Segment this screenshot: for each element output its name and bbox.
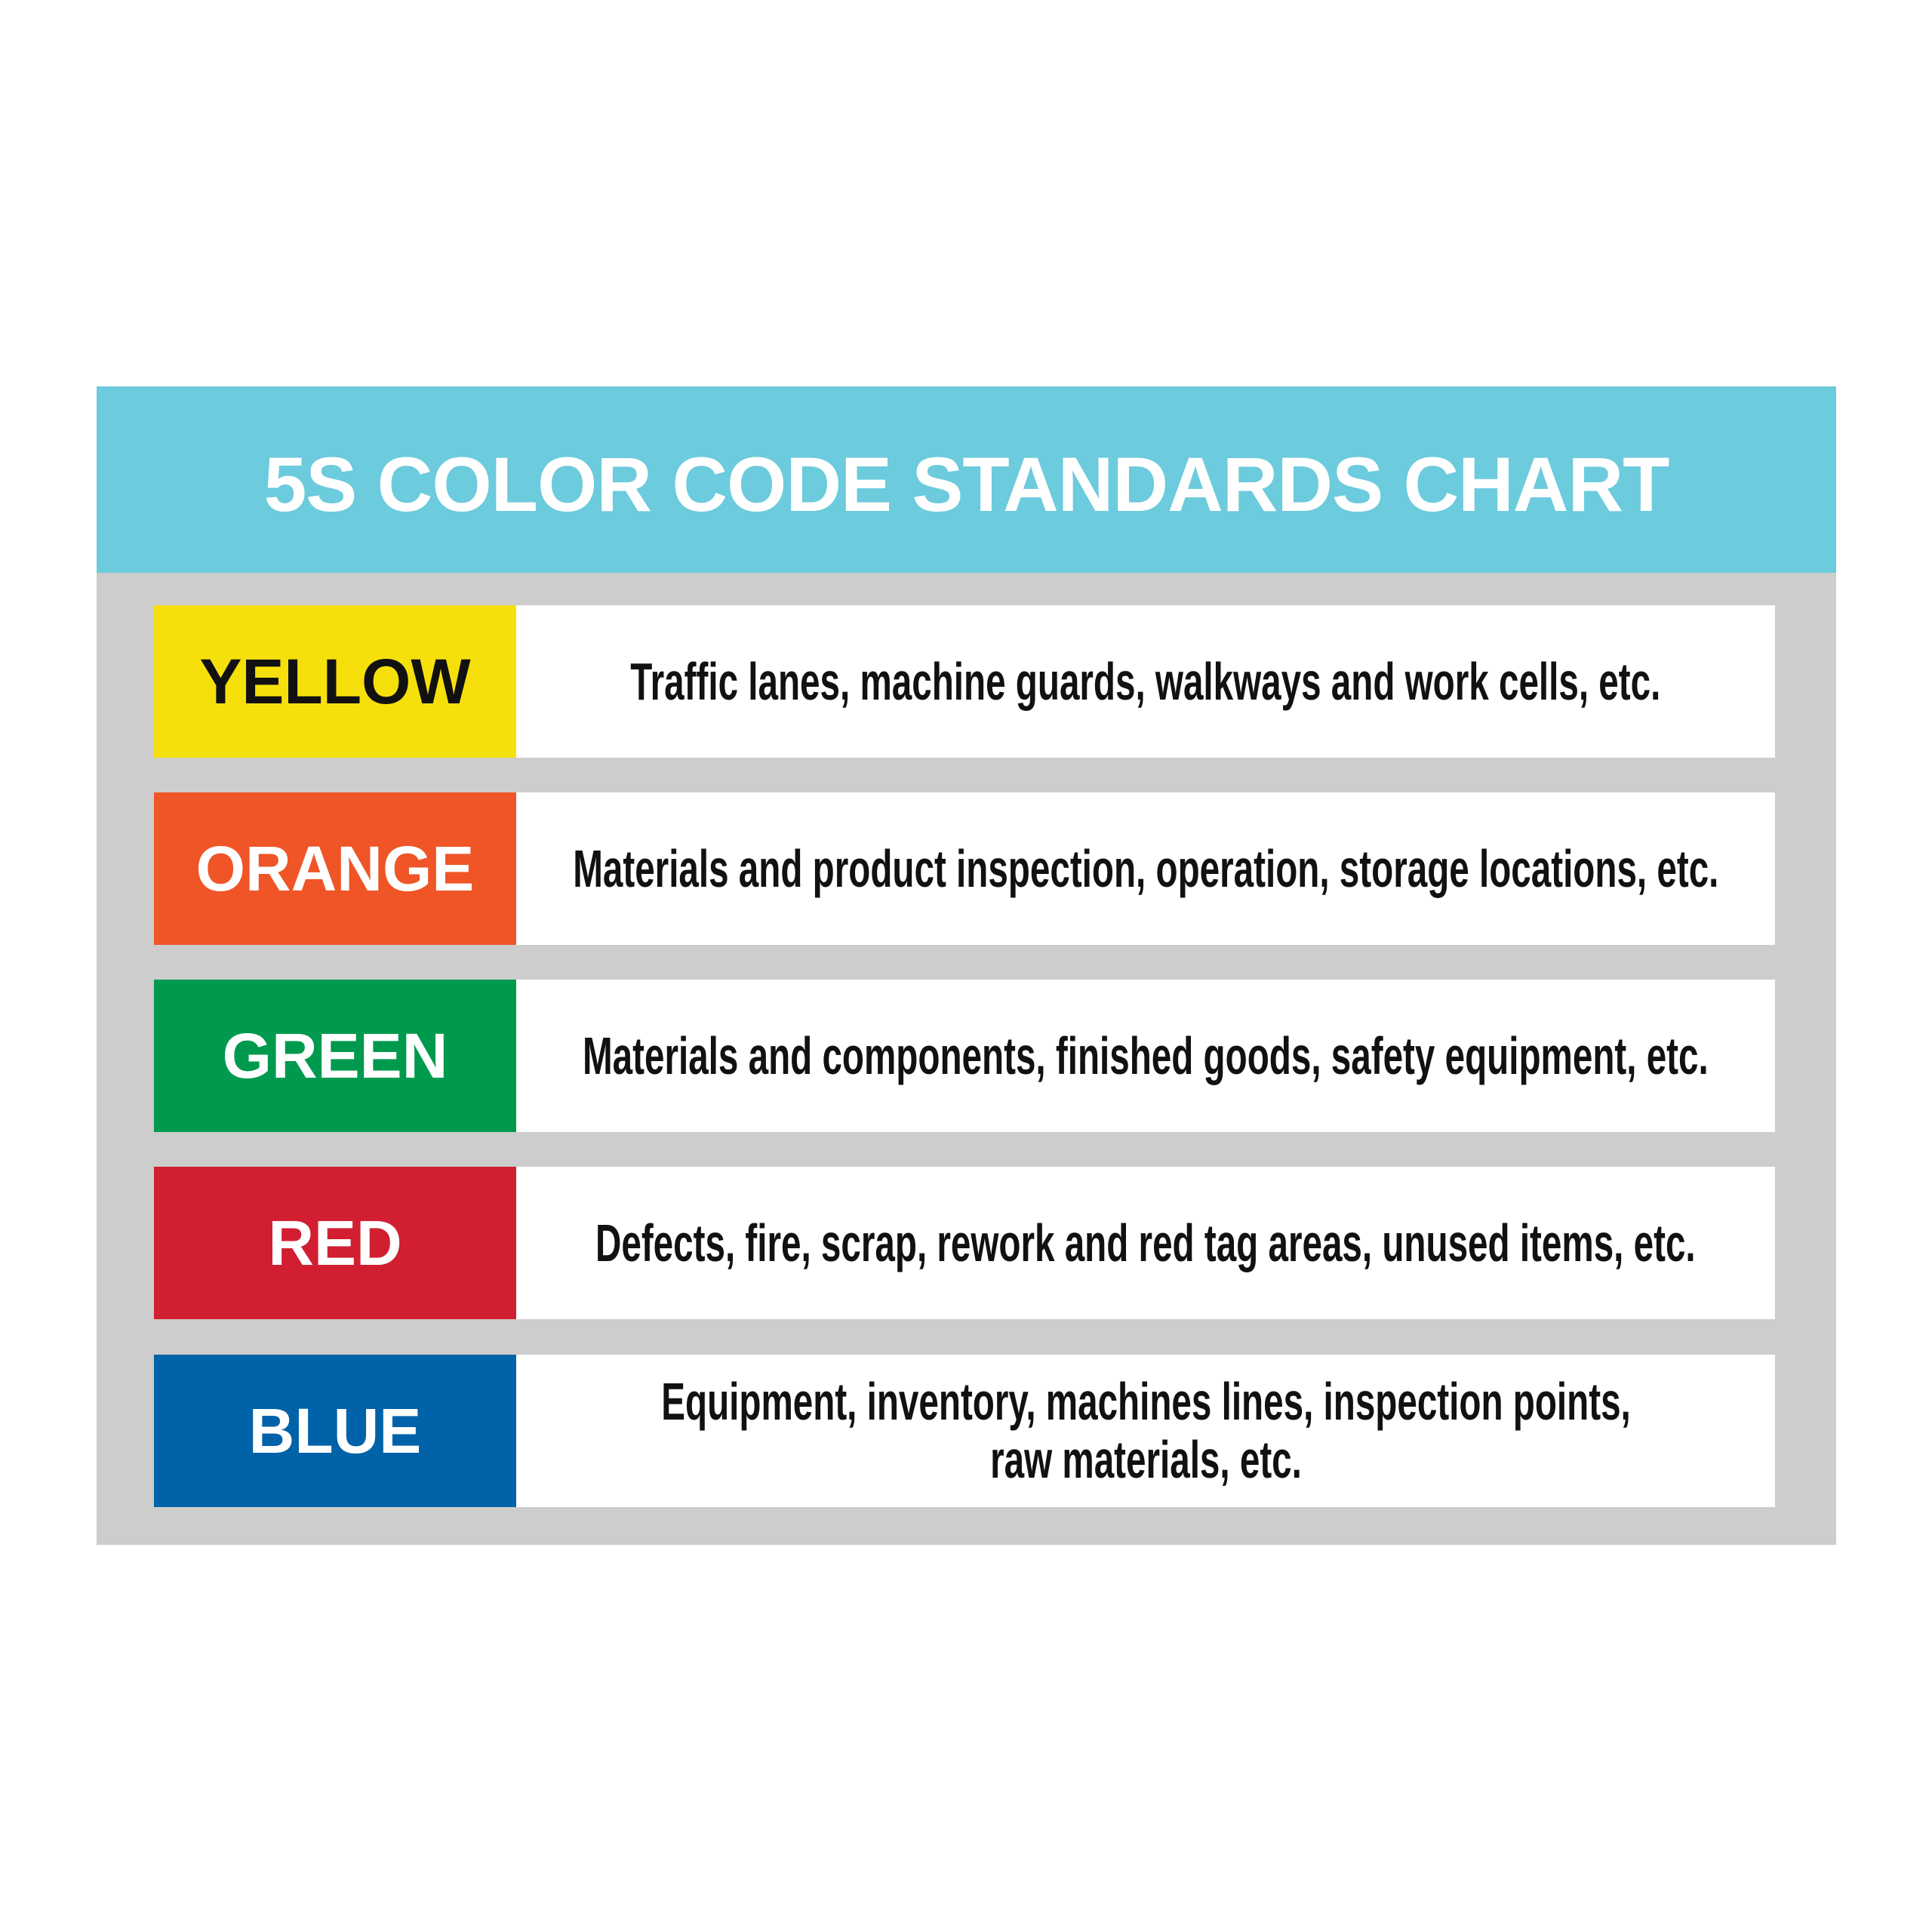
label: green bbox=[154, 980, 516, 1132]
panel: chart body bbox=[97, 573, 1836, 1545]
label: orange: ORANGE bbox=[196, 833, 474, 904]
row: orange bbox=[154, 792, 1775, 945]
label: blue: BLUE bbox=[249, 1395, 421, 1466]
label: green: GREEN bbox=[223, 1020, 448, 1091]
label: red bbox=[154, 1167, 516, 1319]
label: red: RED bbox=[268, 1208, 402, 1278]
label: yellow: YELLOW bbox=[199, 646, 471, 717]
description: blue: raw materials, etc. bbox=[990, 1430, 1301, 1489]
description: blue: Equipment, inventory, machines lines, inspection points, bbox=[661, 1372, 1630, 1431]
title banner bbox=[97, 386, 1836, 573]
row: green bbox=[154, 980, 1775, 1132]
label: orange bbox=[154, 792, 516, 945]
description: green: Materials and components, finished goods, safety equipment, etc. bbox=[583, 1026, 1709, 1085]
row: yellow bbox=[154, 605, 1775, 758]
description: red: Defects, fire, scrap, rework and red tag areas, unused items, etc. bbox=[595, 1214, 1696, 1272]
description: blue bbox=[661, 1372, 1630, 1489]
description: orange: Materials and product inspection, operation, storage locations, etc. bbox=[573, 839, 1718, 898]
row: red bbox=[154, 1167, 1775, 1319]
label: yellow bbox=[154, 605, 516, 758]
description: yellow: Traffic lanes, machine guards, walkways and work cells, etc. bbox=[630, 652, 1661, 711]
row: blue bbox=[154, 1355, 1775, 1507]
title banner: 5S COLOR CODE STANDARDS CHART bbox=[264, 441, 1669, 528]
label: blue bbox=[154, 1355, 516, 1507]
